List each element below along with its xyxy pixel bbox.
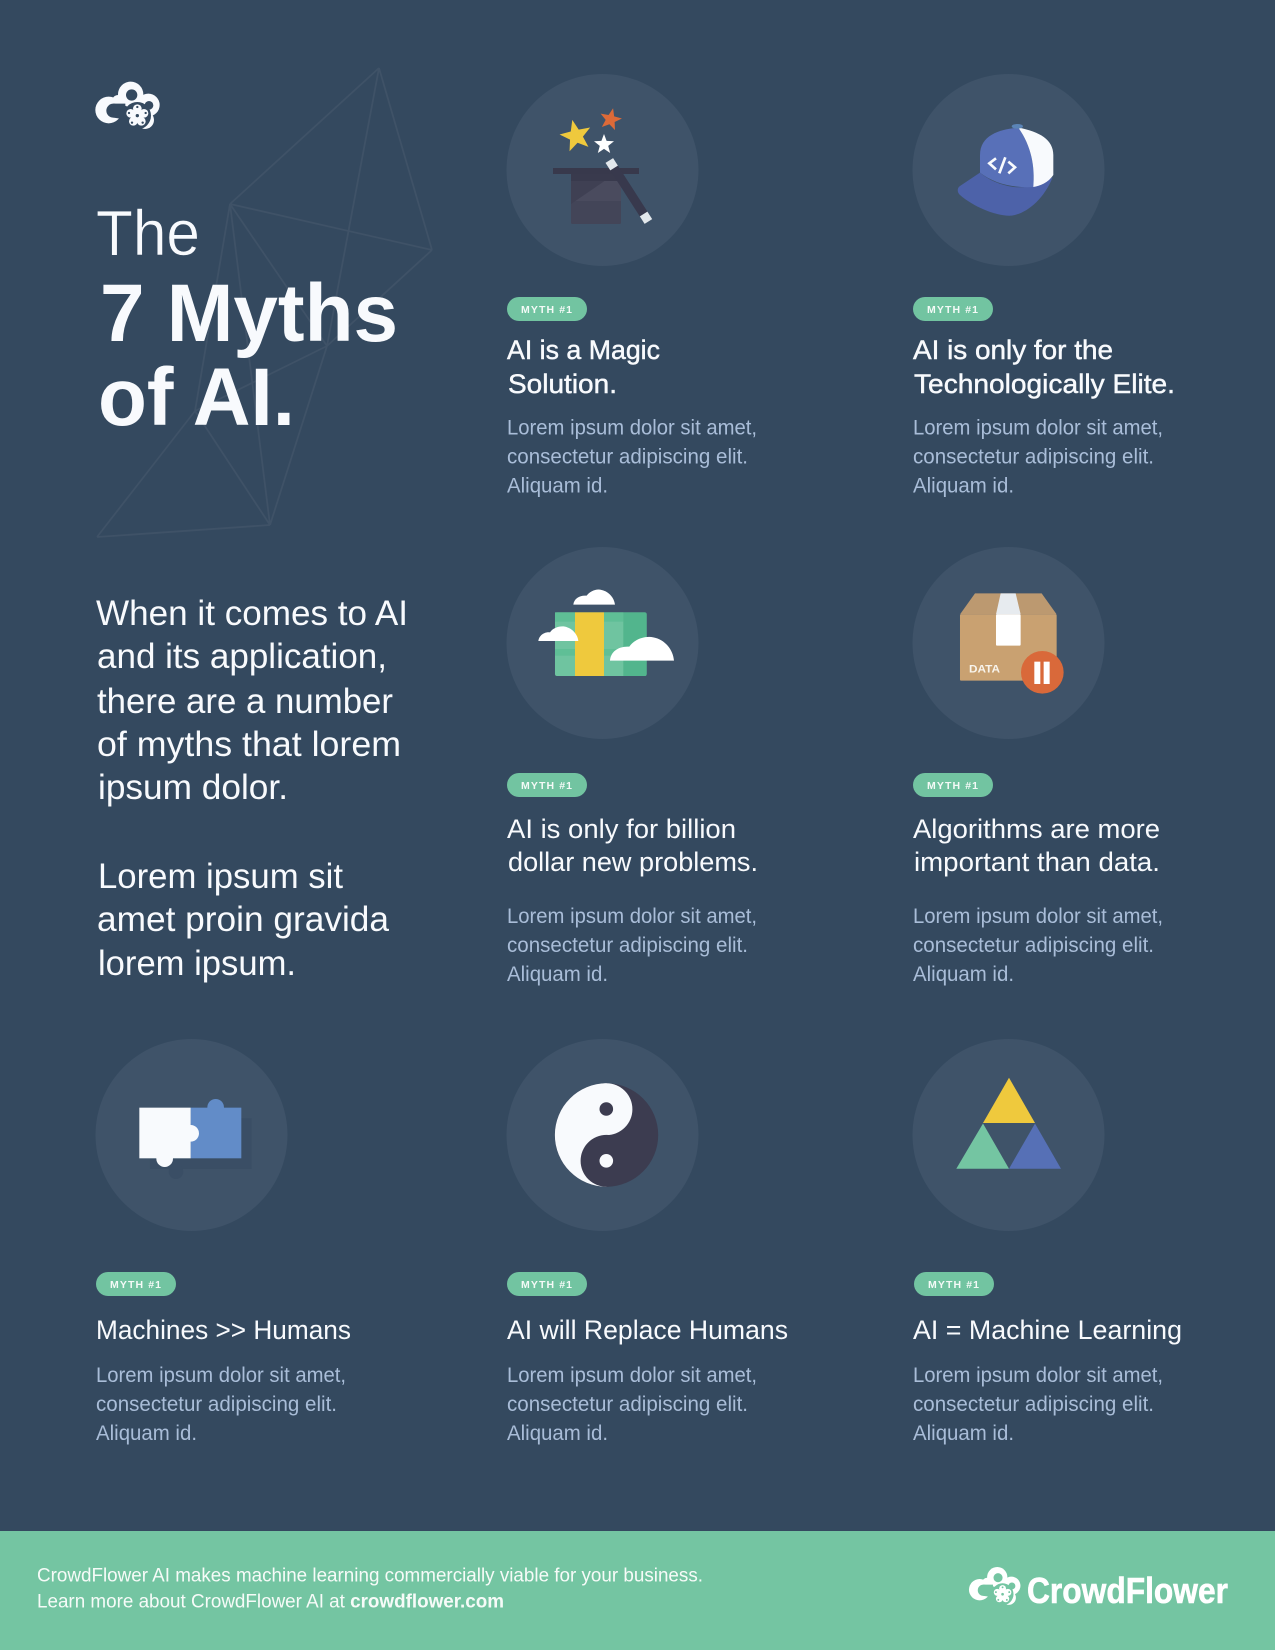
footer text (37, 1566, 703, 1612)
badge (507, 1272, 587, 1296)
heading: AI will Replace Humans (507, 1315, 788, 1345)
body text: consectetur adipiscing elit. (913, 933, 1154, 957)
body text: consectetur adipiscing elit. (913, 1392, 1154, 1416)
heading: Solution. (508, 369, 617, 399)
heading (913, 814, 1160, 877)
body text (913, 416, 1163, 498)
icon: data box with pause (912, 547, 1104, 739)
badge: MYTH #1 (110, 1279, 161, 1291)
heading: AI is only for the (913, 335, 1113, 365)
title: of AI. (98, 352, 295, 443)
badge: MYTH #1 (521, 1279, 572, 1291)
badge (507, 297, 587, 321)
icon: money and clouds (506, 547, 698, 739)
intro text (96, 594, 408, 983)
body text: Lorem ipsum dolor sit amet, (507, 904, 757, 928)
heading: Technologically Elite. (914, 369, 1175, 399)
body text (507, 416, 757, 498)
heading (507, 335, 660, 399)
footer logo (969, 1567, 1228, 1611)
intro text: When it comes to AI (96, 594, 408, 633)
badge: MYTH #1 (927, 780, 978, 792)
heading: AI is a Magic (507, 335, 660, 365)
badge (913, 773, 993, 797)
body text: Aliquam id. (507, 962, 608, 986)
heading (507, 814, 758, 877)
panel: myth technologically elite (912, 74, 1175, 498)
heading (913, 335, 1175, 399)
intro text: amet proin gravida (97, 900, 390, 939)
body text: consectetur adipiscing elit. (507, 444, 748, 468)
badge (913, 297, 993, 321)
footer text: Learn more about CrowdFlower AI at crowdflower.com (37, 1592, 504, 1612)
heading: Algorithms are more (913, 814, 1160, 844)
body text (507, 1363, 757, 1445)
panel: myth machines vs humans (96, 1039, 351, 1445)
heading: Machines >> Humans (96, 1315, 351, 1345)
intro text: of myths that lorem (97, 725, 401, 764)
intro text: lorem ipsum. (98, 944, 296, 983)
icon: puzzle pieces (96, 1039, 288, 1231)
heading: AI is only for billion (507, 814, 736, 844)
body text: Lorem ipsum dolor sit amet, (913, 904, 1163, 928)
intro text: ipsum dolor. (98, 768, 288, 807)
body text: Lorem ipsum dolor sit amet, (507, 416, 757, 440)
badge (507, 773, 587, 797)
panel: myth billion dollar problems (506, 547, 758, 986)
body text: consectetur adipiscing elit. (96, 1392, 337, 1416)
body text: Aliquam id. (913, 474, 1014, 498)
body text: consectetur adipiscing elit. (507, 933, 748, 957)
body text: Aliquam id. (507, 474, 608, 498)
intro text: Lorem ipsum sit (98, 857, 343, 896)
panel: myth machine learning (912, 1039, 1182, 1445)
panel: myth replace humans (506, 1039, 788, 1445)
footer band (0, 1531, 1275, 1650)
heading: important than data. (914, 847, 1160, 877)
title: The (96, 197, 200, 269)
icon: coder cap (912, 74, 1104, 266)
title: 7 Myths (100, 268, 398, 359)
badge: MYTH #1 (521, 780, 572, 792)
badge: MYTH #1 (927, 304, 978, 316)
body text: consectetur adipiscing elit. (913, 444, 1154, 468)
body text (913, 1363, 1163, 1445)
logo: CrowdFlower mark (95, 82, 160, 129)
body text: Aliquam id. (507, 1421, 608, 1445)
badge: MYTH #1 (521, 304, 572, 316)
body text: Lorem ipsum dolor sit amet, (507, 1363, 757, 1387)
body text: Lorem ipsum dolor sit amet, (913, 1363, 1163, 1387)
body text (913, 904, 1163, 986)
body text: Lorem ipsum dolor sit amet, (96, 1363, 346, 1387)
body text (96, 1363, 346, 1445)
body text (507, 904, 757, 986)
icon: yin yang (506, 1039, 698, 1231)
badge (914, 1272, 994, 1296)
icon: magic hat and wand (506, 74, 698, 266)
badge: MYTH #1 (928, 1279, 979, 1291)
panel: myth algorithms vs data (912, 547, 1163, 986)
badge (96, 1272, 176, 1296)
body text: Aliquam id. (913, 962, 1014, 986)
heading: AI = Machine Learning (913, 1315, 1182, 1345)
footer logo: CrowdFlower (1027, 1570, 1228, 1611)
body text: Aliquam id. (913, 1421, 1014, 1445)
icon: data box with pause: DATA (969, 663, 1000, 675)
title (96, 197, 398, 443)
heading: dollar new problems. (508, 847, 758, 877)
footer text: CrowdFlower AI makes machine learning commercially viable for your business. (37, 1566, 703, 1586)
intro text: and its application, (97, 637, 387, 676)
icon: three triangles (912, 1039, 1104, 1231)
body text: Lorem ipsum dolor sit amet, (913, 416, 1163, 440)
body text: consectetur adipiscing elit. (507, 1392, 748, 1416)
intro text: there are a number (97, 682, 393, 721)
body text: Aliquam id. (96, 1421, 197, 1445)
panel: myth magic solution (506, 74, 757, 498)
